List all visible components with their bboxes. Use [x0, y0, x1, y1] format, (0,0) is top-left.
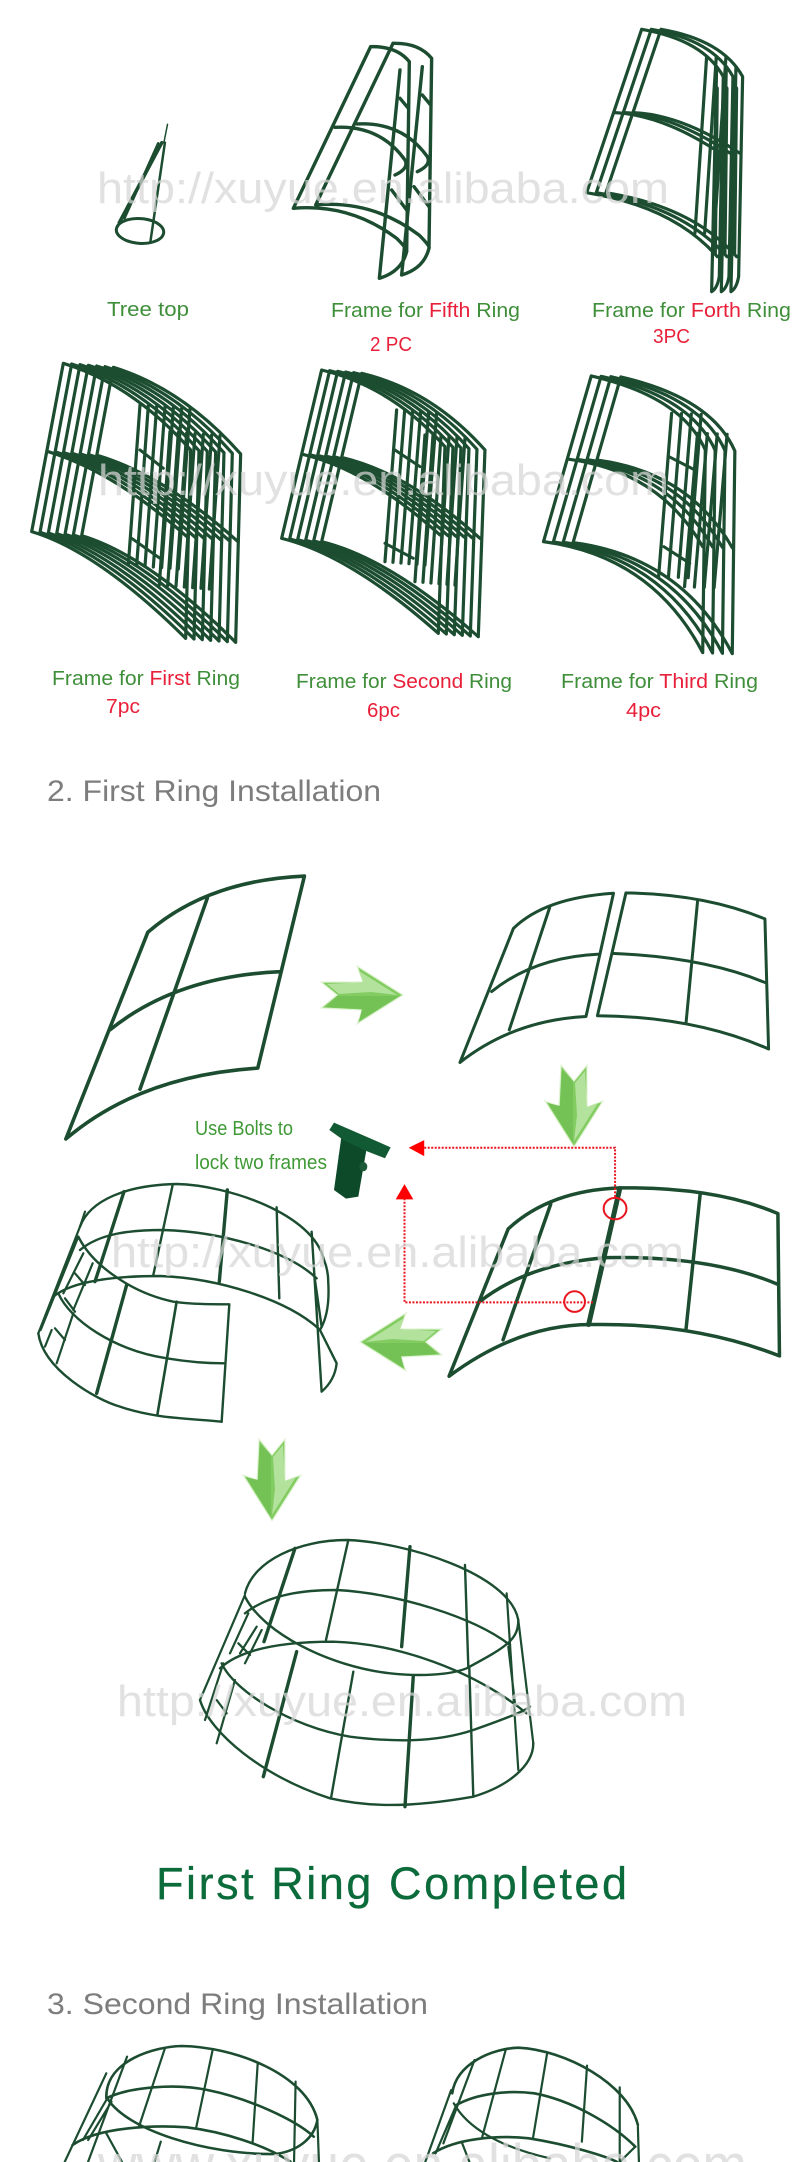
open ring assembly: [38, 1184, 337, 1422]
icon: bolt: [329, 1123, 391, 1199]
label: frame for first ring: Frame for First Ring: [52, 668, 240, 690]
label: use bolts to: Use Bolts to: [195, 1118, 293, 1140]
label: frame for third ring: Frame for Third Ring: [561, 671, 758, 693]
watermark: http://xuyue.en.alibaba.com: [117, 1677, 687, 1726]
arrow: left: [360, 1313, 442, 1371]
second ring assembly, left: [65, 2046, 319, 2162]
joined frames: [449, 1188, 779, 1376]
single quarter frame: [66, 876, 304, 1139]
label: 7pc: 7pc: [106, 696, 140, 718]
second ring assembly, right: [425, 2048, 639, 2162]
watermark: http://xuyue.en.alibaba.com: [98, 456, 669, 505]
frame for fifth ring: [293, 43, 432, 278]
label: 2 PC: 2 PC: [370, 334, 412, 356]
label: 3PC: 3PC: [653, 326, 690, 348]
watermark: http://xuyue.en.alibaba.com: [111, 1228, 684, 1277]
frame for first ring: [32, 363, 241, 642]
watermark: http://xuyue.en.alibaba.com: [97, 164, 669, 213]
frame for second ring: [282, 370, 485, 637]
tree top frame: [113, 124, 168, 246]
label: 4pc: 4pc: [626, 700, 661, 722]
label: frame for forth ring: Frame for Forth Ring: [592, 300, 791, 322]
headline: first ring completed: First Ring Completed: [156, 1858, 627, 1909]
heading: second ring installation: 3. Second Ring Installation: [47, 1988, 428, 2021]
arrow: down: [545, 1065, 603, 1147]
arrow: down to completed ring: [243, 1439, 301, 1521]
callout: red bolt markers: [396, 1140, 626, 1312]
label: lock two frames: lock two frames: [195, 1152, 327, 1174]
heading: first ring installation: 2. First Ring Installation: [47, 775, 381, 808]
label: tree top: Tree top: [107, 299, 189, 321]
two frames side by side: [460, 893, 769, 1062]
label: frame for fifth ring: Frame for Fifth Ring: [331, 300, 520, 322]
label: 6pc: 6pc: [367, 700, 400, 722]
label: frame for second ring: Frame for Second Ring: [296, 671, 512, 693]
frame for third ring: [543, 376, 735, 654]
arrow: right: [321, 966, 403, 1024]
frame for forth ring: [587, 29, 743, 292]
completed first ring: [200, 1540, 533, 1807]
